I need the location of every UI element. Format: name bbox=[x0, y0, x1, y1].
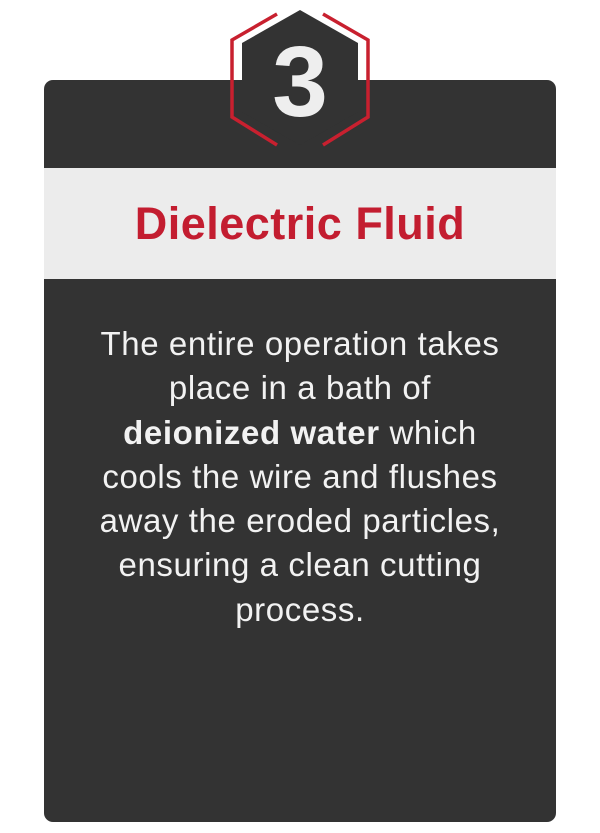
title: Dielectric Fluid bbox=[135, 198, 465, 249]
badge: hexagon number 3: 3 bbox=[272, 26, 328, 138]
body text: process. bbox=[235, 591, 365, 628]
body text: cools the wire and flushes bbox=[102, 458, 498, 495]
body text: deionized water which bbox=[123, 414, 477, 451]
card bbox=[44, 80, 556, 822]
body text: The entire operation takes bbox=[100, 325, 500, 362]
badge: hexagon number 3 bbox=[230, 10, 370, 146]
body text bbox=[100, 325, 500, 628]
body text: ensuring a clean cutting bbox=[119, 546, 481, 583]
body text: place in a bath of bbox=[169, 369, 431, 406]
body text: away the eroded particles, bbox=[100, 502, 500, 539]
title band bbox=[44, 168, 556, 279]
